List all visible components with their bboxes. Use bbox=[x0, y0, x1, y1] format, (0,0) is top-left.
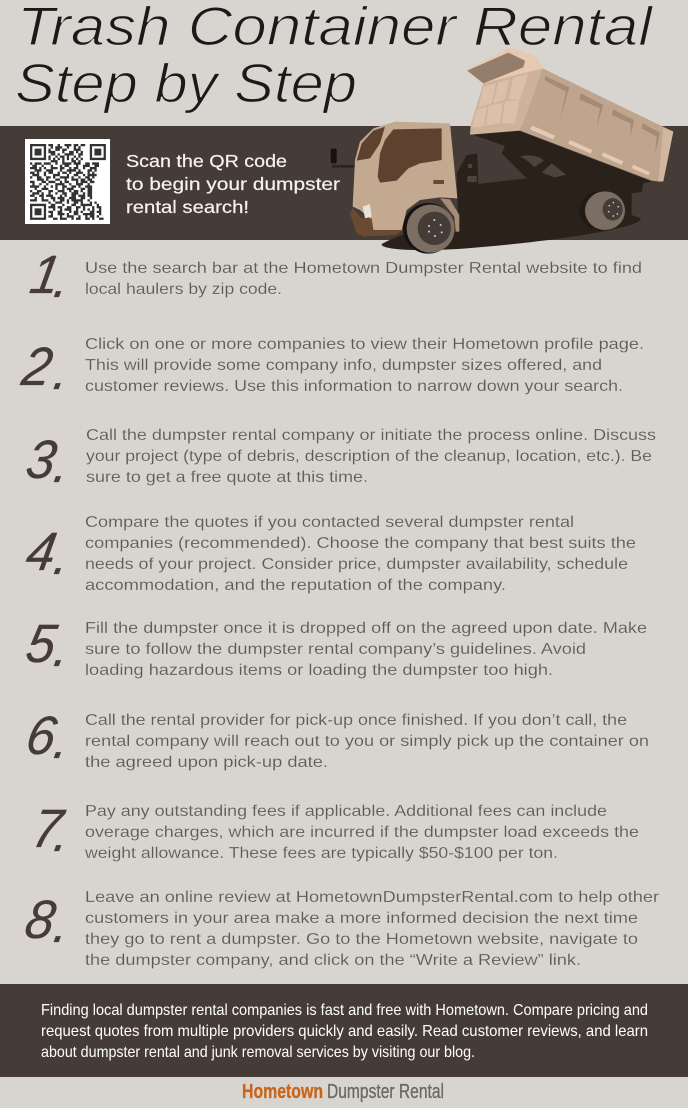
step 3 text bbox=[86, 427, 656, 486]
dump bed front bbox=[470, 68, 543, 135]
number 6: 6 bbox=[22, 706, 61, 766]
number 3: . bbox=[50, 434, 75, 494]
mud flap bbox=[440, 198, 459, 232]
title: Step by Step bbox=[15, 52, 357, 114]
footer band bbox=[0, 984, 688, 1077]
bed ribs bbox=[545, 76, 660, 155]
tailgate bbox=[466, 47, 543, 83]
step 7 text bbox=[84, 803, 639, 862]
door handle bbox=[433, 180, 444, 184]
step 5 text: loading hazardous items or loading the dumpster too high. bbox=[85, 662, 553, 679]
QR call to action bbox=[126, 151, 340, 217]
logo: Dumpster Rental bbox=[327, 1081, 444, 1103]
step 1 text: Use the search bar at the Hometown Dumpster Rental website to find bbox=[85, 260, 642, 277]
chassis gaps bbox=[467, 155, 566, 182]
step 2 bbox=[16, 336, 644, 401]
headlight bbox=[363, 204, 372, 218]
footer text: about dumpster rental and junk removal services by visiting our blog. bbox=[41, 1044, 475, 1061]
step 4 bbox=[21, 514, 636, 594]
step 6 text: the agreed upon pick-up date. bbox=[85, 754, 328, 771]
number 8: 8 bbox=[21, 890, 60, 950]
step 8 text: the dumpster company, and click on the “Write a Review” link. bbox=[85, 952, 581, 969]
logo: Hometown bbox=[242, 1081, 323, 1103]
mirror bbox=[331, 149, 355, 168]
step 6 bbox=[21, 706, 649, 771]
step 8 bbox=[20, 889, 660, 969]
step 2 text bbox=[85, 336, 644, 395]
number 6: . bbox=[50, 710, 75, 770]
step 4 text: Compare the quotes if you contacted several dumpster rental bbox=[85, 514, 574, 531]
number 4: . bbox=[50, 526, 75, 586]
step 7 text: Pay any outstanding fees if applicable. Additional fees can include bbox=[85, 803, 607, 820]
step 3 text: Call the dumpster rental company or initiate the process online. Discuss bbox=[86, 427, 656, 444]
bumper bbox=[350, 208, 403, 237]
step 7 text: weight allowance. These fees are typically $50-$100 per ton. bbox=[84, 845, 558, 862]
step 8 text bbox=[85, 889, 660, 969]
step 4 text: accommodation, and the reputation of the company. bbox=[85, 577, 506, 594]
logo bbox=[242, 1081, 444, 1103]
step 8 text: they go to rent a dumpster. Go to the Hometown website, navigate to bbox=[85, 931, 638, 948]
number 3: 3 bbox=[22, 430, 61, 490]
side window bbox=[357, 127, 385, 161]
bed front panes bbox=[472, 73, 528, 127]
step 4 text bbox=[85, 514, 636, 594]
number 7: 7 bbox=[28, 799, 67, 859]
step 2 text: Click on one or more companies to view their Hometown profile page. bbox=[85, 336, 644, 353]
number 1: . bbox=[50, 249, 75, 309]
QR call to action: to begin your dumpster bbox=[126, 174, 340, 194]
step 5 bbox=[21, 614, 647, 679]
number 8: . bbox=[50, 894, 74, 954]
step 6 text bbox=[85, 712, 649, 771]
cab bbox=[353, 122, 457, 230]
step 1 text: local haulers by zip code. bbox=[85, 281, 282, 298]
step 8 text: customers in your area make a more informed decision the next time bbox=[85, 910, 638, 927]
step 3 text: your project (type of debris, description of the cleanup, location, etc.). Be bbox=[86, 448, 652, 465]
header band bbox=[0, 126, 688, 240]
number 2: 2 bbox=[18, 337, 57, 397]
front wheel bbox=[403, 203, 455, 254]
step 3 bbox=[21, 427, 656, 494]
QR call to action: rental search! bbox=[126, 197, 249, 217]
chassis bbox=[457, 131, 652, 224]
ground shadow bbox=[382, 213, 641, 250]
number 2: . bbox=[49, 341, 74, 401]
tailgate inside bbox=[467, 53, 525, 83]
dump bed lip bbox=[658, 127, 673, 182]
QR code bbox=[25, 139, 110, 224]
step 8 text: Leave an online review at HometownDumpsterRental.com to help other bbox=[85, 889, 660, 906]
step 2 text: customer reviews. Use this information to narrow down your search. bbox=[85, 378, 623, 395]
QR call to action: Scan the QR code bbox=[126, 151, 287, 171]
number 5: . bbox=[50, 618, 75, 678]
footer text bbox=[41, 1002, 648, 1061]
title bbox=[15, 0, 654, 114]
step 4 text: needs of your project. Consider price, dumpster availability, schedule bbox=[85, 556, 628, 573]
windshield bbox=[378, 128, 442, 183]
step 5 text: sure to follow the dumpster rental company’s guidelines. Avoid bbox=[85, 641, 586, 658]
number 1: 1 bbox=[26, 245, 65, 305]
number 7: . bbox=[50, 803, 75, 863]
number 5: 5 bbox=[22, 614, 61, 674]
step 1 bbox=[25, 245, 642, 309]
step 3 text: sure to get a free quote at this time. bbox=[86, 469, 368, 486]
rear wheel bbox=[579, 191, 625, 230]
step 7 bbox=[27, 799, 639, 863]
step 5 text: Fill the dumpster once it is dropped off on the agreed upon date. Make bbox=[85, 620, 647, 637]
icon: dump truck bbox=[331, 47, 673, 254]
step 7 text: overage charges, which are incurred if the dumpster load exceeds the bbox=[85, 824, 639, 841]
step 6 text: rental company will reach out to you or simply pick up the container on bbox=[85, 733, 649, 750]
step 1 text bbox=[85, 260, 642, 298]
step 2 text: This will provide some company info, dumpster sizes offered, and bbox=[85, 357, 602, 374]
step 6 text: Call the rental provider for pick-up once finished. If you don’t call, the bbox=[85, 712, 627, 729]
footer text: request quotes from multiple providers quickly and easily. Read customer reviews, and learn bbox=[41, 1023, 648, 1040]
bed highlights bbox=[530, 126, 650, 175]
step 5 text bbox=[85, 620, 647, 679]
dump bed side bbox=[520, 68, 673, 182]
step 4 text: companies (recommended). Choose the company that best suits the bbox=[85, 535, 636, 552]
number 4: 4 bbox=[22, 522, 61, 582]
